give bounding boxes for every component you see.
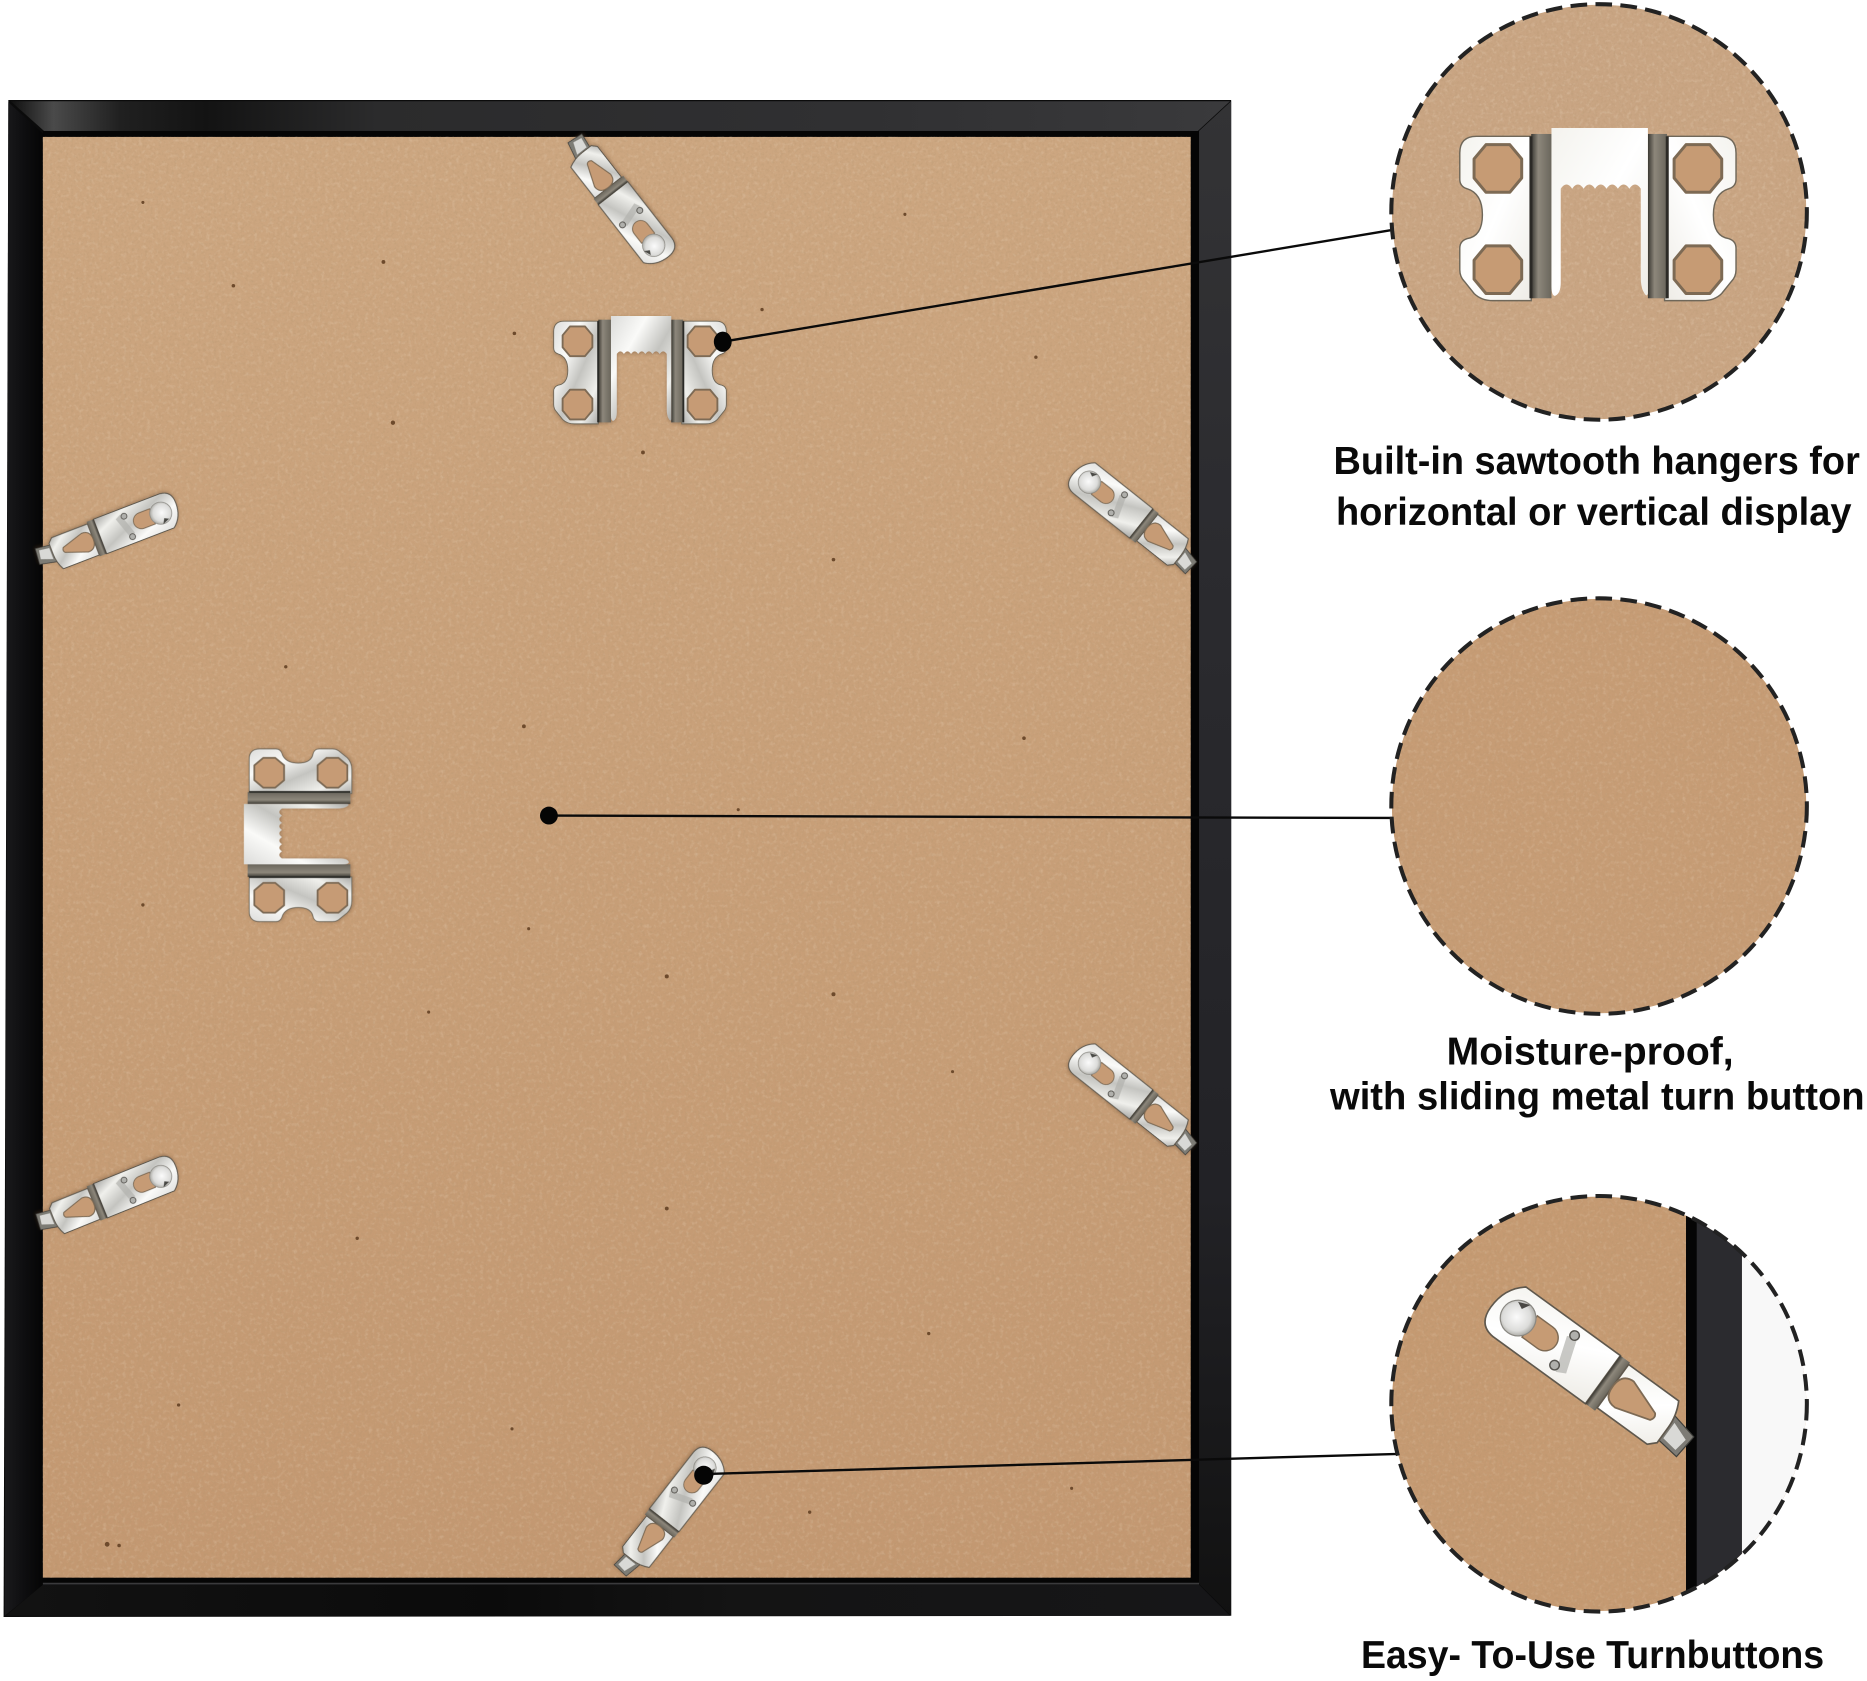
frame moulding: [4, 100, 1231, 1617]
panel: picture frame back: [4, 100, 1231, 1617]
text: turn button caption: Easy- To-Use Turnbuttons: [1361, 1633, 1824, 1677]
turn button: left upper: [31, 490, 184, 578]
MDF backing board: [43, 137, 1191, 1578]
text: sawtooth hanger caption: horizontal or vertical display: [1336, 490, 1852, 534]
panel: turn button detail circle: [1387, 1192, 1813, 1616]
text: sawtooth hanger caption: [1334, 439, 1860, 534]
turn button: right upper: [1064, 456, 1206, 580]
panel: moisture-proof board detail circle: [1387, 594, 1811, 1018]
callout leader: turn button: [694, 1454, 1400, 1485]
sawtooth hanger: top: [554, 316, 726, 424]
sawtooth hanger: left side: [244, 749, 352, 922]
turn button: bottom: [608, 1442, 731, 1585]
icon: enlarged sawtooth hanger: [1460, 128, 1736, 301]
turn button: top: [557, 129, 680, 271]
text: moisture-proof caption: with sliding metal turn button: [1329, 1075, 1865, 1119]
text: moisture-proof caption: [1329, 1029, 1865, 1119]
callout leader: board: [540, 807, 1393, 825]
turn button: right lower: [1064, 1037, 1206, 1161]
text: moisture-proof caption: Moisture-proof,: [1447, 1029, 1734, 1073]
turn button: left lower: [32, 1153, 184, 1243]
icon: enlarged turn button: [1478, 1277, 1707, 1467]
callout leader: sawtooth hanger: [714, 230, 1393, 352]
text: sawtooth hanger caption: Built-in sawtooth hangers for: [1334, 439, 1860, 483]
panel: sawtooth hanger detail circle: [1387, 0, 1811, 424]
